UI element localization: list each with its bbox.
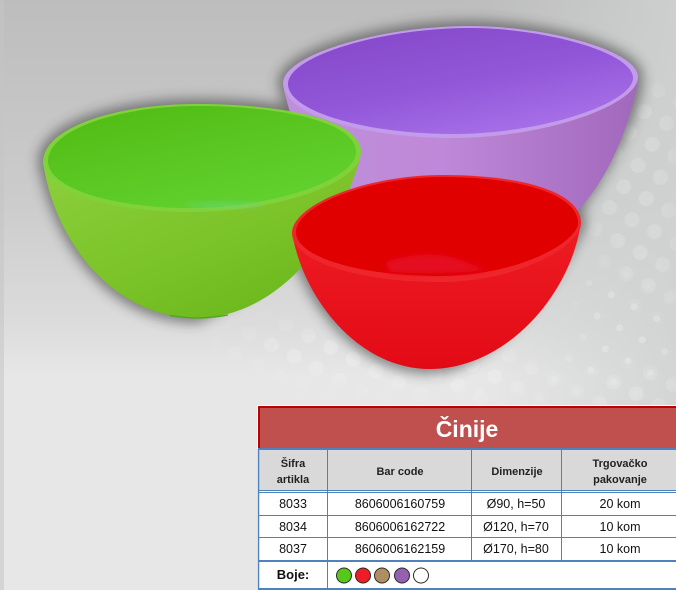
title bar [258,406,676,449]
table header row: artikla [277,474,310,486]
table data rows [279,497,640,556]
bowl shadows [43,26,638,369]
table data rows: 8037 [279,542,307,556]
table data rows: 20 kom [600,497,640,511]
title bar: Činije [436,415,498,442]
table data rows: Ø170, h=80 [483,542,549,556]
table data rows: Ø90, h=50 [487,497,545,511]
colour swatches [336,568,428,583]
table data rows: Ø120, h=70 [483,520,549,534]
grid lines [258,449,676,590]
table header row: Trgovačko [592,458,648,470]
table data rows: 10 kom [600,542,640,556]
product table [257,405,676,590]
red bowl [292,175,581,369]
table data rows: 8606006162722 [355,520,445,534]
table header row [258,449,676,491]
table header row: pakovanje [593,474,647,486]
table header row: Dimenzije [491,466,543,478]
green bowl [43,104,361,318]
table data rows: 8606006162159 [355,542,445,556]
colours label: Boje: [277,567,309,582]
table data rows: 8034 [279,520,307,534]
table data rows: 8033 [279,497,307,511]
table data rows: 10 kom [600,520,640,534]
table data rows: 8606006160759 [355,497,445,511]
purple bowl [283,26,638,232]
table header row: Šifra [281,457,306,470]
table header row: Bar code [376,466,424,478]
